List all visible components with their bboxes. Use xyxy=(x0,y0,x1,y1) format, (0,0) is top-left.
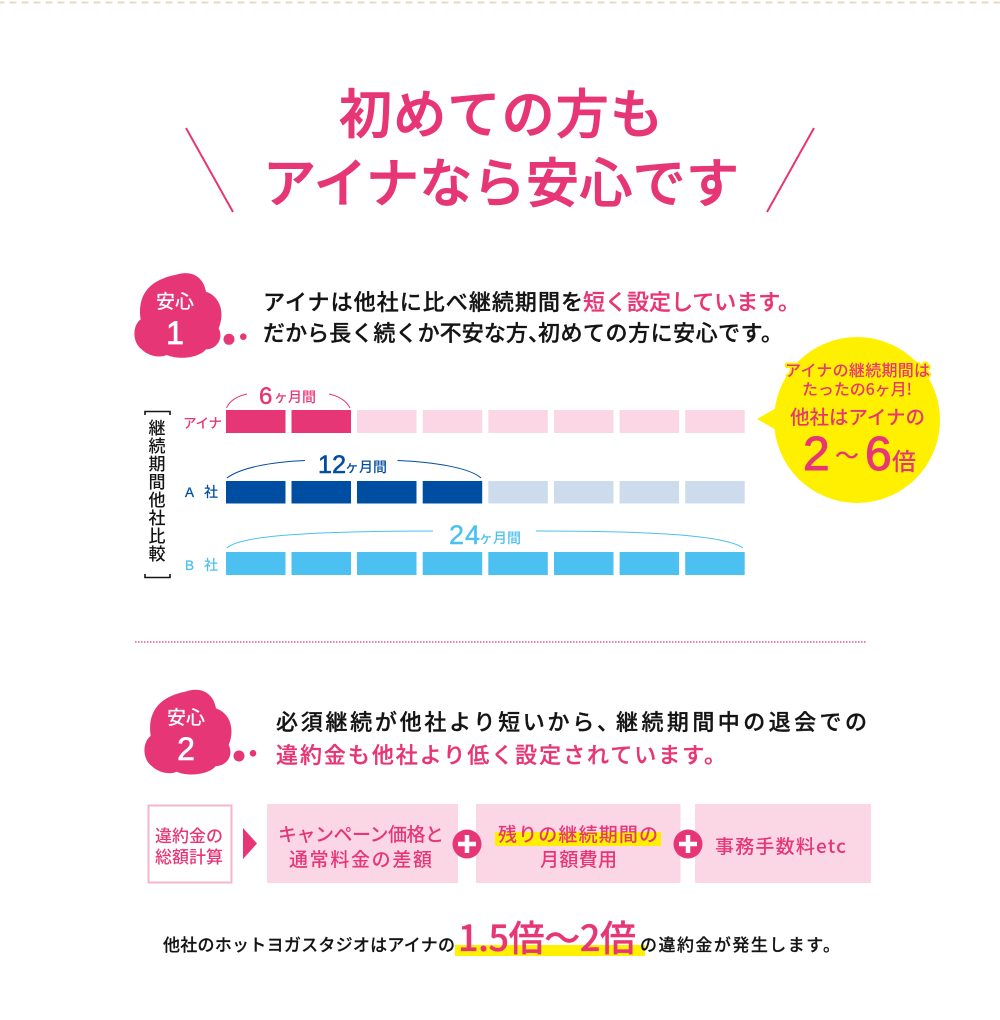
heading: reassurance 1 text: アイナは他社に比べ継続期間を xyxy=(263,285,583,317)
heading: reassurance 1 text: 短く設定しています。 xyxy=(583,285,800,317)
callout: 他社はアイナの2〜6倍: 6 xyxy=(865,428,892,481)
badge: 安心 2 xyxy=(144,690,256,774)
row: アイナ 6ヶ月間: アイナ xyxy=(183,412,222,432)
row: B社 24ヶ月間: 社 xyxy=(204,555,218,575)
chart: contract period comparison xyxy=(145,383,745,578)
callout: 他社はアイナの2〜6倍: 他社はアイナの xyxy=(790,401,925,430)
callout: 他社はアイナの2〜6倍: 〜 xyxy=(835,436,859,471)
row: B社 24ヶ月間: 24 xyxy=(449,520,480,550)
heading: reassurance 2 text xyxy=(276,705,867,770)
box: 違約金の総額計算 xyxy=(148,806,232,882)
conclusion text: 他社のホットヨガスタジオはアイナの xyxy=(163,931,455,956)
title: アイナなら安心です xyxy=(263,142,739,218)
badge: 安心 1: 安心 xyxy=(156,287,194,314)
conclusion text xyxy=(163,910,840,962)
panel: reassurance 2 xyxy=(144,690,871,962)
box: 違約金の総額計算: 違約金の xyxy=(155,822,223,847)
heading: reassurance 1 text: 初めての方に安心です。 xyxy=(538,316,783,348)
box: 違約金の総額計算: 総額計算 xyxy=(155,843,223,868)
heading: reassurance 1 text: だから長く続くか不安な方、 xyxy=(263,316,550,348)
row: A社 12ヶ月間: A xyxy=(185,485,194,500)
axis label: 継続期間他社比較: 続 xyxy=(148,432,166,457)
callout: 他社はアイナの2〜6倍: たったの6ヶ月! xyxy=(802,376,912,400)
row: B社 24ヶ月間 xyxy=(185,520,745,575)
heading: reassurance 1 text xyxy=(263,285,800,348)
row: A社 12ヶ月間 xyxy=(185,451,745,504)
callout: 他社はアイナの2〜6倍: 倍 xyxy=(892,442,916,477)
conclusion text: 1.5倍〜2倍 xyxy=(458,910,636,962)
callout: 他社はアイナの2〜6倍 xyxy=(757,337,940,503)
axis label: 継続期間他社比較: 他 xyxy=(148,486,166,511)
badge: 安心 1: 1 xyxy=(166,315,184,351)
heading: reassurance 2 text: 必須継続が他社より短いから、 xyxy=(276,705,619,737)
box: 事務手数料etc xyxy=(695,804,871,883)
conclusion text: の違約金が発生します。 xyxy=(640,931,840,956)
badge: 安心 2: 2 xyxy=(177,731,195,767)
box: 残りの継続期間の月額費用: 月額費用 xyxy=(540,845,617,872)
box: キャンペーン価格と通常料金の差額: キャンペーン価格と xyxy=(278,820,444,847)
callout: 他社はアイナの2〜6倍: アイナの継続期間は xyxy=(785,357,930,381)
heading: reassurance 2 text: 継続期間中の退会での xyxy=(616,705,867,737)
axis label: 継続期間他社比較: 間 xyxy=(148,468,166,493)
row: B社 24ヶ月間: B xyxy=(185,558,194,573)
box: 事務手数料etc: 事務手数料etc xyxy=(715,832,846,859)
axis label: 継続期間他社比較: 継 xyxy=(148,414,166,439)
row: A社 12ヶ月間: ヶ月間 xyxy=(345,457,387,477)
axis label: 継続期間他社比較: 較 xyxy=(148,540,166,565)
box: キャンペーン価格と通常料金の差額: 通常料金の差額 xyxy=(289,845,432,872)
row: B社 24ヶ月間: ヶ月間 xyxy=(479,528,521,548)
row: A社 12ヶ月間: 社 xyxy=(204,482,218,502)
box: 残りの継続期間の月額費用: 残りの継続期間の xyxy=(498,820,658,847)
row: アイナ 6ヶ月間: 6 xyxy=(259,383,272,410)
panel: reassurance 1 xyxy=(134,273,940,578)
callout: 他社はアイナの2〜6倍: たったの6ヶ月! xyxy=(802,376,912,400)
callout: 他社はアイナの2〜6倍: 2 xyxy=(803,428,830,481)
axis label: 継続期間他社比較: 期 xyxy=(148,450,166,475)
box: キャンペーン価格と通常料金の差額 xyxy=(267,804,458,883)
axis label: 継続期間他社比較: 社 xyxy=(148,504,166,529)
icon: plus 2 xyxy=(674,830,702,858)
axis label: 継続期間他社比較 xyxy=(145,412,170,578)
title: 初めての方も xyxy=(339,73,663,149)
arrow xyxy=(243,828,257,859)
axis label: 継続期間他社比較: 比 xyxy=(148,522,166,547)
icon: plus 1 xyxy=(452,830,482,858)
row: アイナ 6ヶ月間 xyxy=(183,383,745,433)
heading: reassurance 2 text: 違約金も他社より低く設定されています。 xyxy=(276,738,726,770)
formula: cancellation fee calculation xyxy=(148,804,871,883)
row: アイナ 6ヶ月間: ヶ月間 xyxy=(274,387,316,407)
callout: 他社はアイナの2〜6倍: アイナの継続期間は xyxy=(785,357,930,381)
box: 残りの継続期間の月額費用 xyxy=(476,804,680,883)
title xyxy=(186,73,814,218)
badge: 安心 2: 安心 xyxy=(167,703,205,730)
row: A社 12ヶ月間: 12 xyxy=(318,451,346,479)
badge: 安心 1 xyxy=(134,273,247,358)
